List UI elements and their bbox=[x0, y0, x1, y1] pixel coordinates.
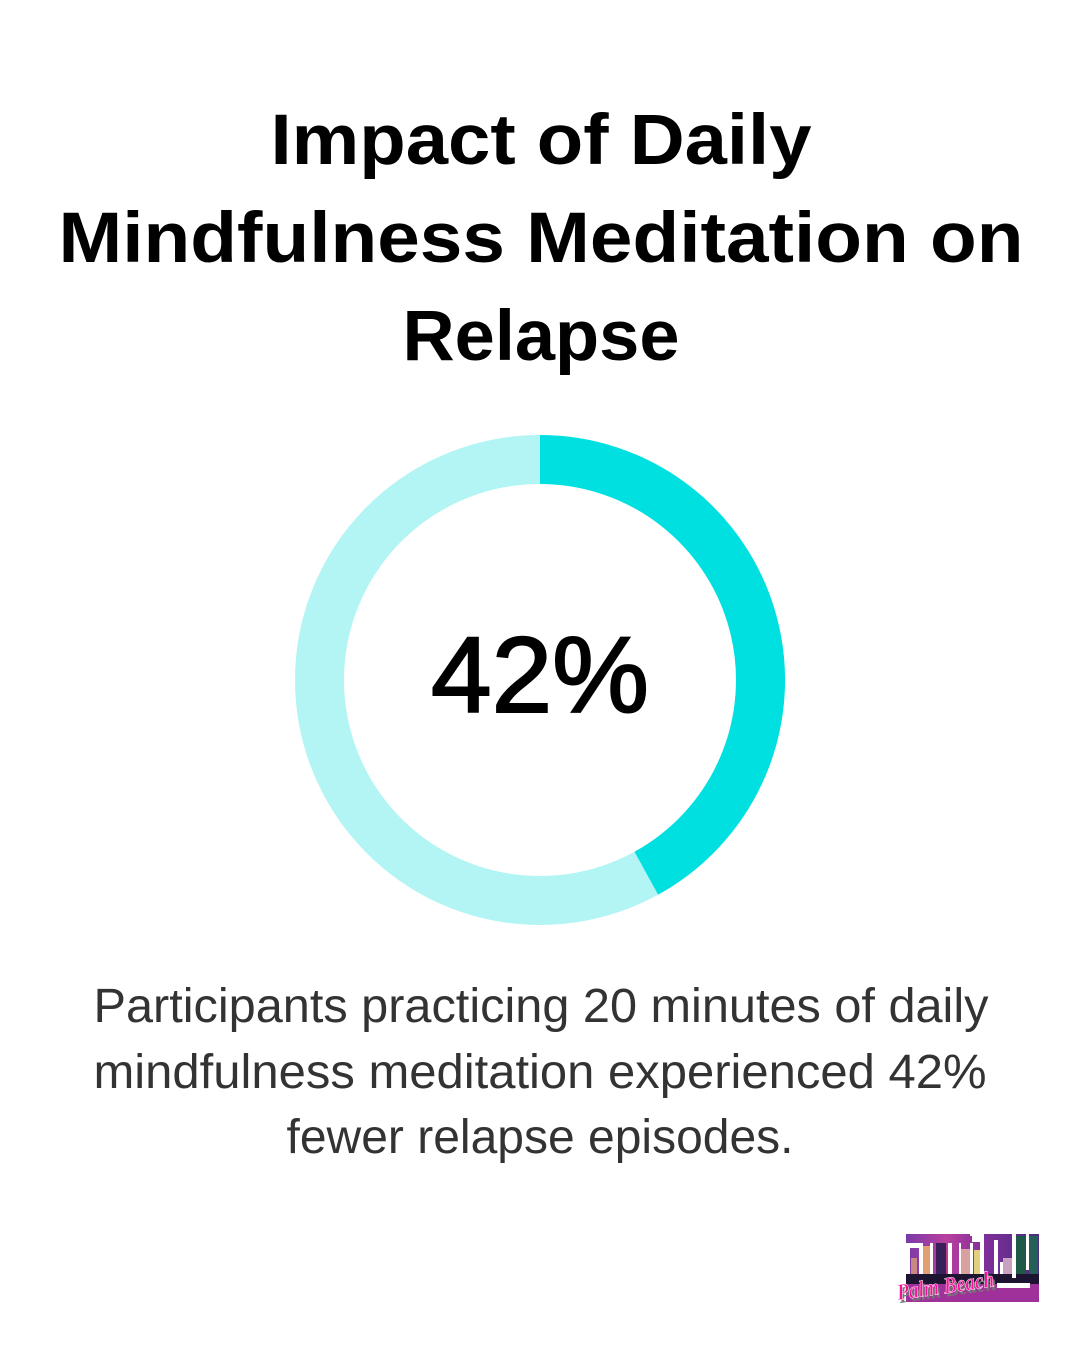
description text: mindfulness meditation experienced 42% bbox=[94, 1046, 987, 1099]
description text: fewer relapse episodes. bbox=[286, 1111, 794, 1164]
description text: Participants practicing 20 minutes of daily bbox=[94, 980, 988, 1033]
title: Relapse bbox=[402, 297, 680, 376]
title bbox=[58, 101, 1024, 376]
logo script: Palm Beach: Palm Beach bbox=[894, 1267, 996, 1305]
title: Impact of Daily bbox=[270, 101, 812, 180]
donut value: 42% bbox=[431, 614, 649, 735]
logo: Amity Palm Beach bbox=[894, 1234, 1039, 1308]
logo script shadow: Palm Beach bbox=[896, 1270, 998, 1308]
logo white letter gaps bbox=[906, 1234, 1030, 1288]
donut chart: 42% bbox=[320, 460, 761, 900]
title: Mindfulness Meditation on bbox=[58, 199, 1024, 278]
description text bbox=[94, 980, 988, 1164]
